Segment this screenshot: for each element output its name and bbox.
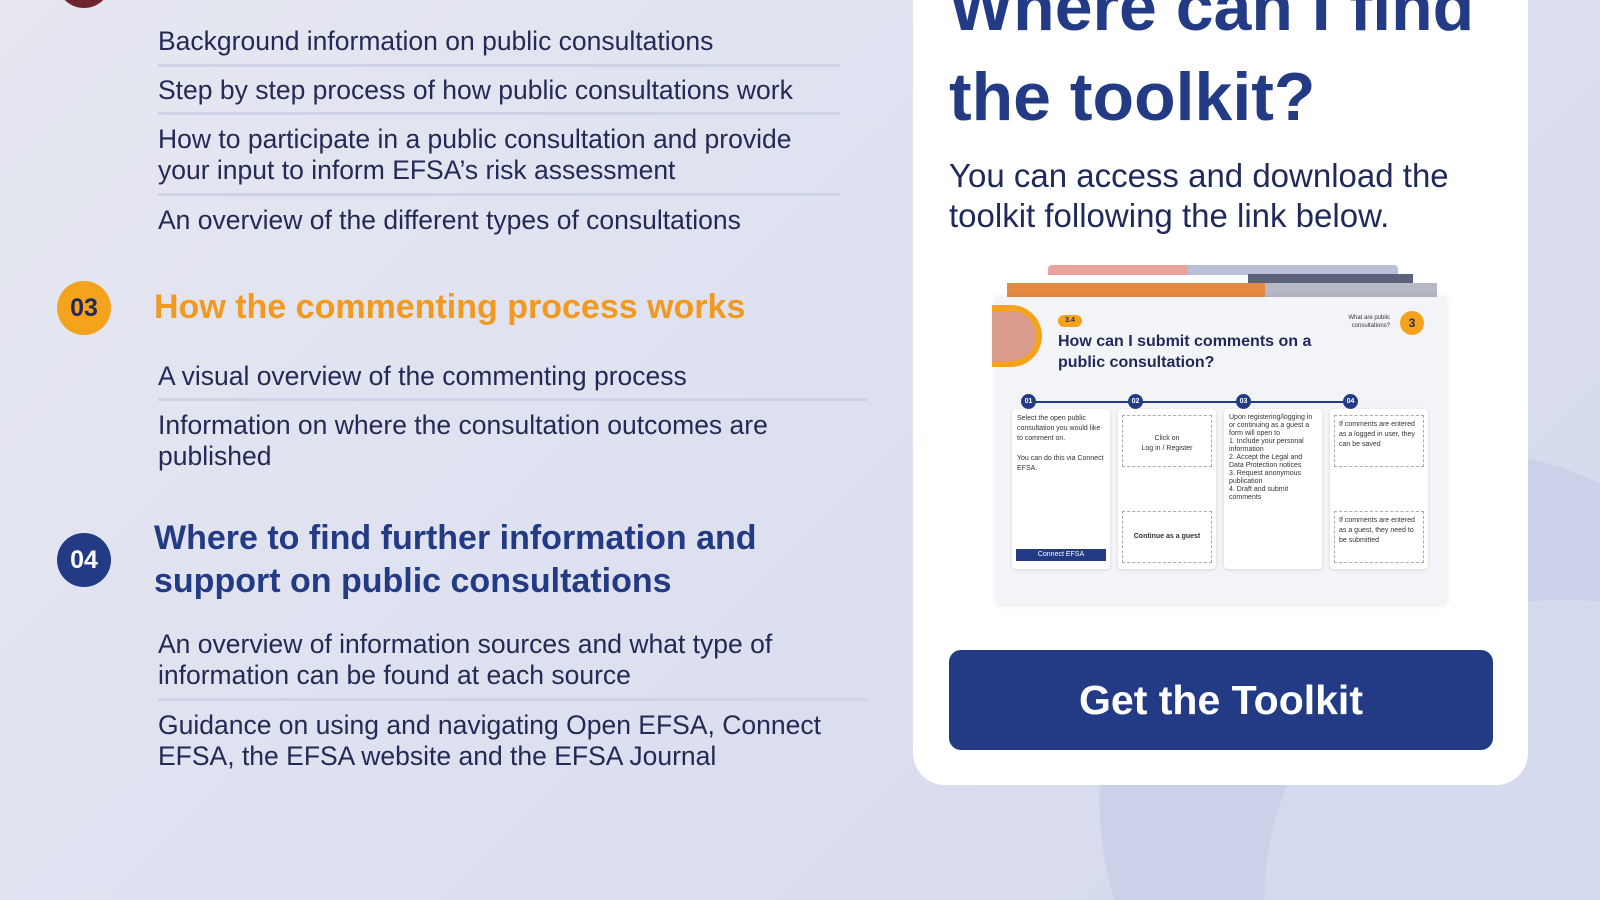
toolkit preview image: 01 <box>1025 398 1032 405</box>
card subtitle <box>949 157 1449 234</box>
heading 04: support on public consultations <box>154 562 672 600</box>
icon: circle 04: 04 <box>70 546 98 574</box>
list: section 03 items <box>158 361 868 471</box>
list: section 04 items <box>158 629 868 771</box>
toolkit preview image: 02 <box>1132 398 1139 405</box>
card title: the toolkit? <box>949 59 1315 135</box>
toolkit preview image: Continue as a guest <box>1134 533 1200 540</box>
list: section 03 items: published <box>158 441 271 471</box>
card subtitle: toolkit following the link below. <box>949 197 1389 234</box>
heading 03: How the commenting process works <box>154 288 745 326</box>
list: section 03 items: A visual overview of the commenting process <box>158 361 687 391</box>
toolkit preview image: Upon registering/logging in or continuing as a guest a form will open to <box>1229 414 1312 437</box>
list: section 04 items: EFSA, the EFSA website and the EFSA Journal <box>158 741 716 771</box>
list: section 02 items: How to participate in a public consultation and provide <box>158 124 791 154</box>
icon: circle 04 <box>57 533 111 587</box>
list: section 02 items: your input to inform EFSA’s risk assessment <box>158 155 675 185</box>
list: section 04 items: Guidance on using and navigating Open EFSA, Connect <box>158 710 821 740</box>
toolkit preview image: Log in / Register <box>1142 445 1192 452</box>
toolkit preview image: 4. Draft and submit comments <box>1229 486 1288 501</box>
toolkit preview image: What are public consultations? <box>1348 315 1390 329</box>
list: section 04 items: information can be found at each source <box>158 660 631 690</box>
panel: toolkit card <box>913 0 1528 785</box>
toolkit preview image <box>913 265 1528 605</box>
toolkit preview image: Connect EFSA <box>1038 551 1084 558</box>
list: section 02 items: An overview of the different types of consultations <box>158 205 741 235</box>
toolkit preview image: 3. Request anonymous publication <box>1229 470 1301 485</box>
toolkit preview image: 3 <box>1409 316 1415 330</box>
icon: circle 03 <box>57 281 111 335</box>
toolkit preview image: 3.4 <box>1065 317 1075 324</box>
card title <box>949 0 1474 135</box>
toolkit preview image: You can do this via Connect EFSA. <box>1017 455 1104 472</box>
button: Get the Toolkit: Get the Toolkit <box>1079 677 1363 723</box>
list: section 04 items: An overview of information sources and what type of <box>158 629 772 659</box>
toolkit preview image: If comments are entered as a logged in user, they can be saved <box>1339 421 1415 448</box>
card subtitle: You can access and download the <box>949 157 1449 194</box>
toolkit preview image: 1. Include your personal information <box>1229 438 1304 453</box>
toolkit preview image: public consultation? <box>1058 354 1214 371</box>
button: Get the Toolkit <box>949 650 1493 750</box>
list: section 02 items: Step by step process of how public consultations work <box>158 75 793 105</box>
icon: circle 02 (partial) <box>57 0 111 8</box>
list: section 03 items: Information on where the consultation outcomes are <box>158 410 768 440</box>
toolkit preview image: 04 <box>1347 398 1354 405</box>
list: section 02 items: Background information on public consultations <box>158 26 713 56</box>
toolkit preview image: If comments are entered as a guest, they need to be submitted <box>1339 517 1415 544</box>
list: section 02 items <box>158 26 840 235</box>
heading 04: Where to find further information and <box>154 519 757 557</box>
toolkit preview image: How can I submit comments on a <box>1058 333 1311 350</box>
heading 04 <box>154 519 757 600</box>
icon: circle 03: 03 <box>70 294 98 322</box>
toolkit preview image: 2. Accept the Legal and Data Protection notices <box>1229 454 1302 469</box>
toolkit preview image: 03 <box>1240 398 1247 405</box>
toolkit preview image: Select the open public consultation you would like to comment on. <box>1017 415 1100 442</box>
toolkit preview image: Click on <box>1155 435 1179 442</box>
